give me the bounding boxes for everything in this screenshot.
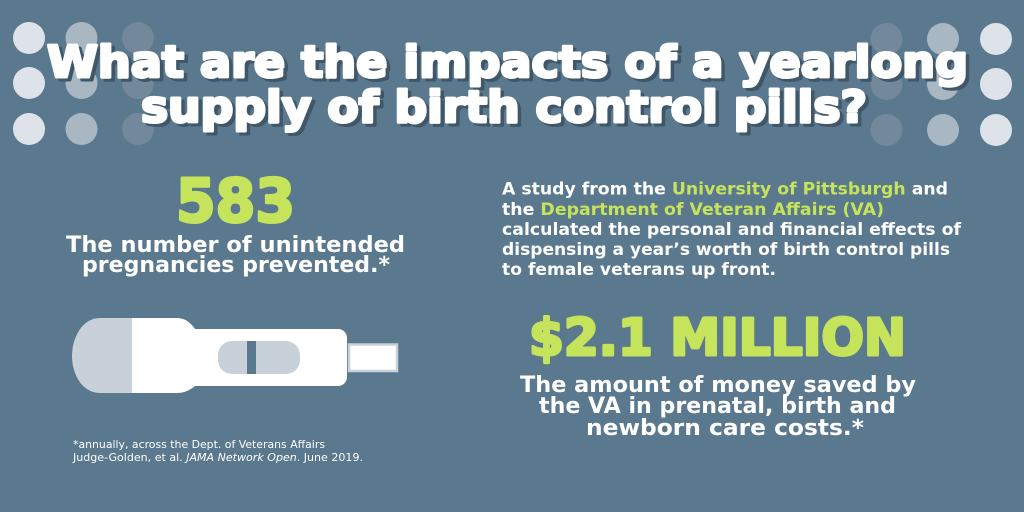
stat caption: unintended pregnancies: [66, 233, 405, 278]
footnote: [72, 438, 363, 464]
title: [47, 37, 972, 136]
stat caption: money saved: [520, 373, 916, 441]
stat: 583: 583: [176, 166, 295, 236]
icon: pregnancy test: [72, 318, 397, 393]
dots: left decorative grid: [13, 22, 154, 145]
study description paragraph: A study from the University of Pittsburgh and: [502, 180, 948, 200]
study description paragraph: calculated the personal and financial effects of: [502, 220, 962, 240]
title: supply of birth control pills?: [144, 85, 871, 136]
footnote: Judge-Golden, et al. JAMA Network Open. June 2019.: [72, 451, 363, 464]
stat caption: unintended pregnancies: The number of unintended: [66, 233, 405, 258]
stat: $2.1 million: $2.1 MILLION: [529, 309, 906, 368]
stat caption: money saved: the VA in prenatal, birth and: [539, 394, 896, 419]
title: What are the impacts of a yearlong: [47, 37, 968, 88]
study description paragraph: [502, 180, 962, 280]
footnote: *annually, across the Dept. of Veterans Affairs: [73, 438, 325, 451]
stat caption: money saved: newborn care costs.*: [586, 416, 865, 441]
stat caption: money saved: The amount of money saved by: [520, 373, 916, 398]
title: supply of birth control pills?: [141, 82, 867, 133]
title: What are the impacts of a yearlong: [50, 40, 972, 91]
study description paragraph: to female veterans up front.: [502, 260, 776, 280]
study description paragraph: the Department of Veteran Affairs (VA): [502, 200, 884, 220]
study description paragraph: dispensing a year’s worth of birth control pills: [502, 240, 950, 260]
stat caption: unintended pregnancies: pregnancies prevented.*: [82, 253, 390, 278]
dots: right decorative grid: [870, 23, 1012, 146]
